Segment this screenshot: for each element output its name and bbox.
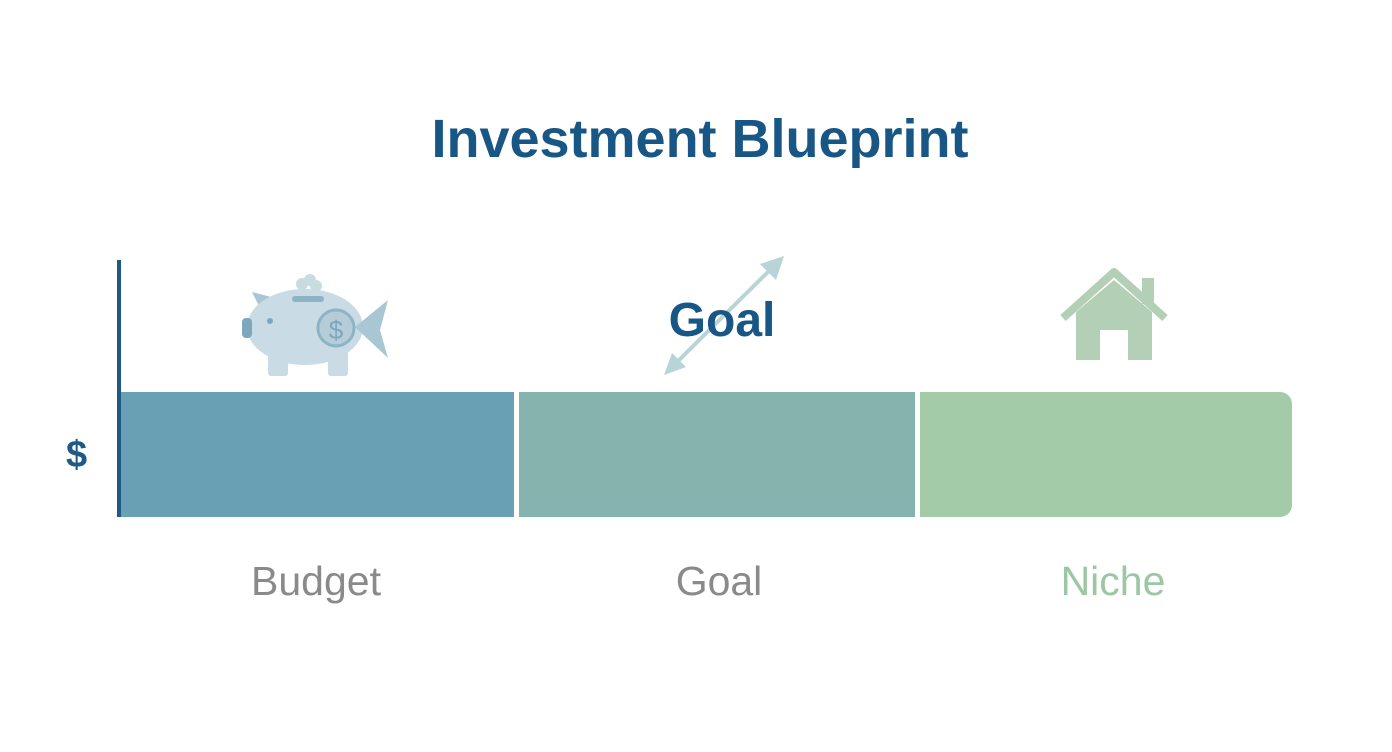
icon: piggy bank: $	[329, 315, 344, 345]
heading: goal: Goal	[669, 294, 775, 347]
label: niche: Niche	[1061, 558, 1165, 604]
bar: budget	[121, 392, 514, 517]
icon: piggy bank	[242, 274, 388, 376]
axis label: dollar: $	[66, 434, 87, 476]
bar: niche	[920, 392, 1292, 517]
icon: double arrow	[664, 256, 784, 375]
axis line	[117, 260, 121, 517]
label: budget: Budget	[251, 558, 381, 604]
label: goal: Goal	[676, 558, 762, 604]
title: Investment Blueprint	[431, 109, 969, 169]
icon: house	[1060, 268, 1168, 360]
bar: goal	[519, 392, 915, 517]
